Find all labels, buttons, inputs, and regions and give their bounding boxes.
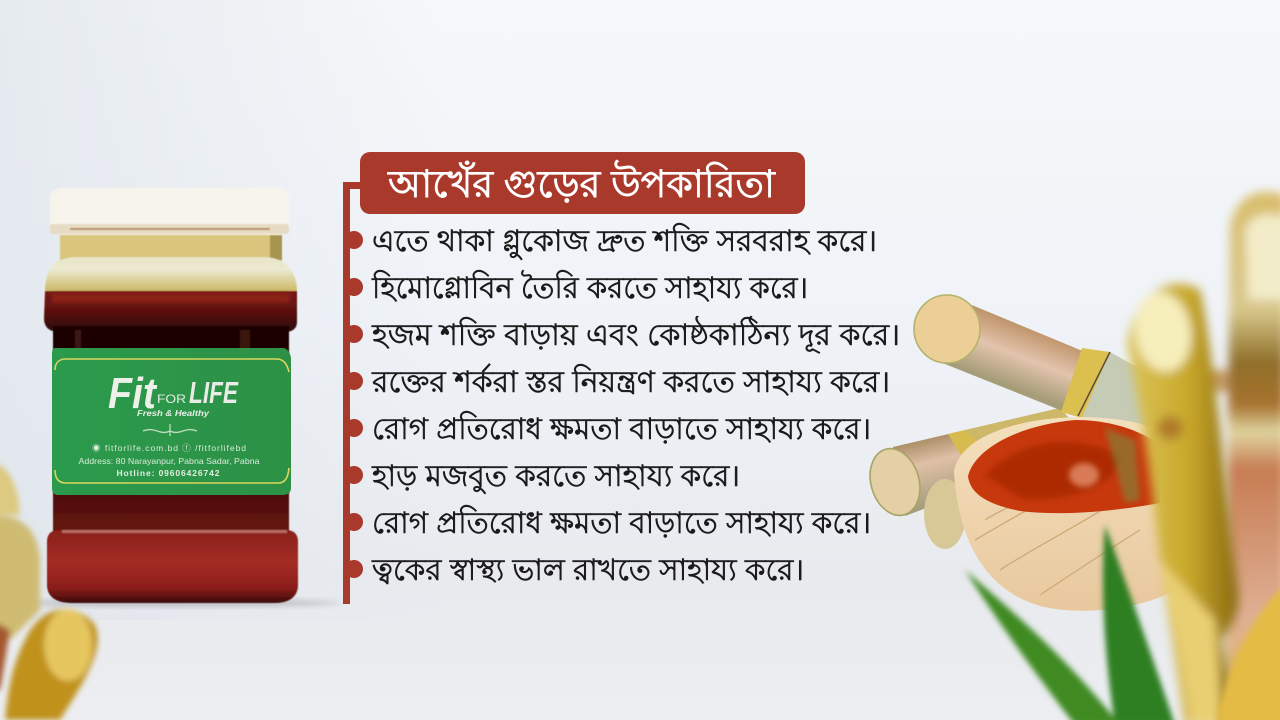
green label <box>52 348 291 495</box>
benefit 4: রক্তের শর্করা স্তর নিয়ন্ত্রণ করতে সাহায্য করে। <box>371 364 890 399</box>
title: আখেঁর গুড়ের উপকারিতা <box>387 160 776 206</box>
wooden bowl <box>954 417 1175 611</box>
benefit 8: ত্বকের স্বাস্থ্য ভাল রাখতে সাহায্য করে। <box>371 554 804 587</box>
title banner <box>360 152 805 214</box>
sugarcane and bowl of molasses <box>863 295 1175 611</box>
contact details: ◉ fitforlife.com.bd ⓕ /fitforlifebd <box>92 443 246 453</box>
small cane end <box>924 479 966 549</box>
upper cane <box>914 295 1160 435</box>
far right cane <box>1200 192 1280 720</box>
green leaves <box>965 525 1175 720</box>
benefit 6: হাড় মজবুত করতে সাহায্য করে। <box>371 460 740 494</box>
lid <box>50 188 289 235</box>
tagline: Fresh & Healthy <box>137 409 210 418</box>
jar glass and contents <box>44 232 298 603</box>
benefit 7: রোগ প্রতিরোধ ক্ষমতা বাড়াতে সাহায্য করে। <box>372 505 871 540</box>
blurred cane, bottom left <box>0 463 98 720</box>
benefit 3: হজম শক্তি বাড়ায় এবং কোষ্ঠকাঠিন্য দূর করে। <box>371 316 900 353</box>
central cane stalk <box>1127 284 1240 720</box>
lower cane <box>863 408 1075 521</box>
ornament <box>143 424 197 436</box>
green label: LIFE <box>189 375 239 410</box>
jar of molasses <box>20 188 340 607</box>
brand logo: Fit <box>108 369 158 418</box>
blurred foreground leaves and cane <box>965 192 1280 720</box>
benefits panel <box>343 152 900 604</box>
benefit 5: রোগ প্রতিরোধ ক্ষমতা বাড়াতে সাহায্য করে। <box>372 411 871 446</box>
green label: FOR <box>157 394 186 406</box>
lower foreground cane <box>1215 585 1280 720</box>
green label: Address: 80 Narayanpur, Pabna Sadar, Pabna <box>78 456 260 466</box>
connector line <box>343 182 360 604</box>
jar shadow <box>20 599 340 607</box>
benefit 2: হিমোগ্লোবিন তৈরি করতে সাহায্য করে। <box>371 270 808 305</box>
green label: Hotline: 09606426742 <box>116 468 220 478</box>
label border <box>55 359 289 483</box>
benefit 1: এতে থাকা গ্লুকোজ দ্রুত শক্তি সরবরাহ করে। <box>372 223 877 260</box>
molasses in bowl <box>968 420 1160 513</box>
